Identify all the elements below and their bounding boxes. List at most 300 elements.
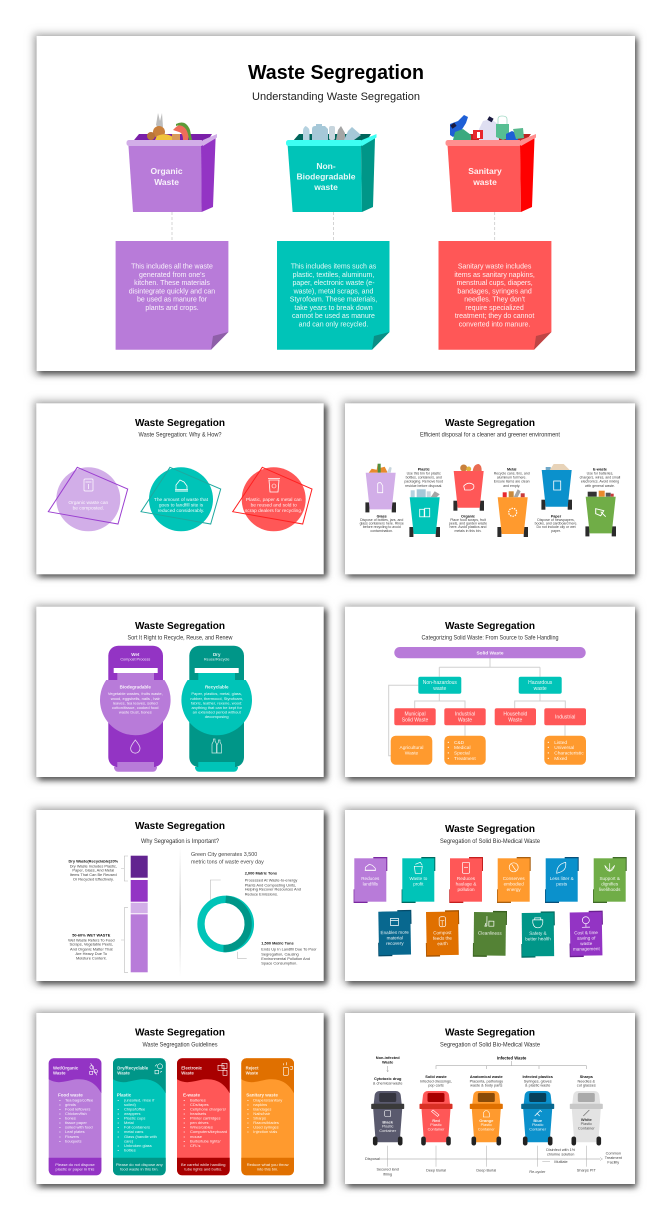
node: solid waste: Solid Waste bbox=[476, 650, 504, 656]
text: dry waste: Paper, Glass, And Metal bbox=[72, 868, 114, 873]
label: metal: aluminum foil here. bbox=[497, 475, 527, 479]
card: compost feeds the earth bbox=[425, 910, 460, 957]
bin: sanitary waste: waste bbox=[472, 177, 497, 187]
disposal flow: filling bbox=[383, 1172, 392, 1176]
card: cost and time saving: waste bbox=[580, 941, 593, 946]
card: reject waste: into this bin. bbox=[257, 1167, 278, 1172]
text: green city: metric tons of waste every day bbox=[191, 860, 264, 866]
bin: paper bbox=[541, 464, 572, 510]
card: dry recyclable waste: Unbroken glass bbox=[124, 1143, 152, 1148]
note card: sanitary waste: menstrual cups, diapers, bbox=[456, 280, 533, 287]
label: paper: paper. bbox=[551, 529, 561, 533]
label: infected waste tree: Infected Waste bbox=[497, 1056, 527, 1060]
card: dry recyclable waste: Glass (handle with bbox=[124, 1134, 157, 1139]
circle: landfill reduction bbox=[141, 467, 221, 531]
label: anatomical waste: waste & body parts bbox=[470, 1084, 503, 1088]
node: agricultural waste: Agricultural bbox=[400, 745, 424, 751]
label: metal: and empty. bbox=[503, 484, 520, 488]
label: sharps: Needles & bbox=[578, 1080, 596, 1084]
card: reject waste: • bbox=[247, 1102, 249, 1107]
card: electronic waste: • bbox=[184, 1129, 186, 1134]
callout: 2,000 metric tons: Reduce Emissions. bbox=[245, 891, 278, 896]
disposal flow: Deep Burial bbox=[476, 1169, 496, 1173]
disposal flow: Disposal bbox=[365, 1156, 380, 1161]
label: infected plastics: Infected plastics bbox=[522, 1074, 553, 1079]
note card: sanitary waste: converted into manure. bbox=[459, 321, 530, 328]
card: dry recyclable waste: wrappers bbox=[124, 1111, 140, 1116]
node: hazardous sublist: • bbox=[548, 752, 550, 756]
note card: sanitary waste: Sanitary waste includes bbox=[458, 264, 532, 270]
text: dry waste: Dry Waste Includes Plastic, bbox=[70, 863, 117, 868]
label: paper bbox=[535, 514, 577, 533]
card: reject waste: Reject bbox=[246, 1065, 259, 1070]
label: metal: Ensure items are clean bbox=[494, 480, 530, 484]
card: reject waste: Diapers/sanitary bbox=[253, 1097, 282, 1102]
node: hazardous sublist: • bbox=[548, 746, 550, 751]
card: less litter and pests bbox=[545, 857, 579, 903]
node: hazardous sublist: Characteristic bbox=[554, 750, 584, 756]
node: industrial sublist: • bbox=[448, 741, 450, 746]
node: industrial bbox=[544, 708, 586, 725]
node: hazardous sublist: Listed bbox=[554, 740, 567, 746]
label: anatomical waste bbox=[470, 1074, 504, 1088]
callout: 1,500 metric tons bbox=[237, 940, 317, 966]
text: wet waste: Moisture Content. bbox=[76, 956, 107, 961]
card: wet biodegradable: Biodegradable bbox=[120, 684, 151, 689]
note card: organic waste: plants and crops. bbox=[145, 305, 199, 312]
card: electronic waste: • bbox=[184, 1102, 186, 1107]
card: electronic waste: tube lights and bulbs. bbox=[184, 1167, 222, 1172]
label: anatomical waste: Anatomical waste bbox=[470, 1074, 504, 1079]
label: paper: Do not include oily or wet bbox=[536, 525, 576, 529]
note card: sanitary waste: needles. They don't bbox=[464, 297, 525, 304]
card: reject waste: Reduce what you throw bbox=[247, 1162, 289, 1167]
note card: sanitary waste: bandages, syringes and bbox=[457, 288, 532, 295]
node: non-hazardous waste bbox=[418, 677, 461, 694]
bin: non-biodegradable waste: waste bbox=[313, 182, 338, 192]
node: hazardous waste: waste bbox=[534, 686, 547, 692]
subtitle: Sort It Right to Recycle, Reuse, and Renew bbox=[128, 636, 233, 642]
card: support and dignifies livelihoods bbox=[593, 857, 627, 903]
card: wet organic waste: plastic or paper in this bbox=[56, 1167, 94, 1172]
card: dry recyclable: anything that can be kept for bbox=[191, 705, 243, 710]
disposal flow: Re-cycler bbox=[529, 1170, 546, 1174]
card: wet biodegradable bbox=[100, 646, 171, 772]
card: reduces landfills bbox=[354, 857, 387, 903]
card: wet organic waste: • bbox=[59, 1111, 61, 1116]
circle: recycling: scrap dealers for recycling. bbox=[245, 508, 302, 514]
bin: black cytotoxic bbox=[371, 1091, 404, 1146]
label: e-waste: with general waste. bbox=[585, 484, 615, 488]
disposal flow: Deep Burial bbox=[426, 1169, 446, 1173]
card: electronic waste: mouse bbox=[190, 1134, 203, 1139]
icon: bottles bbox=[212, 739, 222, 753]
node: hazardous sublist bbox=[544, 736, 586, 765]
card: dry recyclable bbox=[181, 646, 252, 772]
card: cleanliness bbox=[473, 911, 507, 957]
disposal flow: Treatment bbox=[605, 1156, 623, 1160]
card: wet organic waste: • bbox=[59, 1134, 61, 1139]
panel: sort it right bbox=[33, 604, 327, 780]
card: reject waste: Razors/blades bbox=[253, 1120, 279, 1125]
note card: non-biodegradable waste: cannot be used as manure bbox=[292, 313, 375, 320]
note card: non-biodegradable waste: take years to break down bbox=[294, 305, 373, 312]
card: electronic waste: • bbox=[184, 1106, 186, 1111]
card: dry recyclable: an extended period without bbox=[193, 710, 242, 714]
text: wet waste: Scraps, Vegetable Peels, bbox=[70, 942, 113, 947]
bin: red solid waste: Container bbox=[428, 1126, 445, 1131]
icon: water drop bbox=[131, 740, 140, 753]
title: Waste Segregation bbox=[445, 418, 535, 429]
card: reject waste: • bbox=[247, 1097, 249, 1102]
text: wet waste bbox=[68, 933, 115, 961]
card: electronic waste: CDs/tapes bbox=[190, 1102, 209, 1107]
bin: red solid waste: Red bbox=[432, 1118, 440, 1123]
card: dry recyclable: fabric, leather, rexene, wood: bbox=[191, 700, 242, 705]
card: conserves embodied energy bbox=[497, 857, 531, 903]
subtitle: Why Segregation is Important? bbox=[141, 839, 220, 845]
label: plastic: Plastic bbox=[418, 467, 430, 471]
node: municipal solid waste: Municipal bbox=[404, 712, 426, 718]
node: household waste bbox=[495, 708, 536, 725]
text: wet waste: Are Heavy Due To bbox=[76, 951, 107, 956]
card: dry recyclable waste: Waste bbox=[117, 1071, 130, 1076]
card: safety and better health: better health bbox=[525, 936, 551, 941]
card: enables more material recovery: Enables more bbox=[380, 930, 409, 935]
card: dry recyclable waste: Dry/Recyclable bbox=[117, 1065, 149, 1070]
node: municipal solid waste: Solid Waste bbox=[402, 718, 428, 724]
subtitle: Categorizing Solid Waste: From Source to Safe Handling bbox=[422, 636, 558, 642]
card: electronic waste: pen drives bbox=[190, 1120, 208, 1125]
callout: 2,000 metric tons: Plants And Composting Units, bbox=[245, 882, 296, 887]
card: reject waste: Sharps bbox=[253, 1116, 266, 1121]
node: hazardous sublist: • bbox=[548, 757, 550, 762]
card: wet biodegradable: Compost Process bbox=[120, 658, 150, 662]
card: wet organic waste: Food leftovers bbox=[65, 1106, 90, 1111]
bin: sanitary waste: Sanitary bbox=[468, 166, 502, 176]
label: infected plastics bbox=[522, 1074, 553, 1088]
card: safety and better health bbox=[521, 911, 555, 958]
disposal flow: Mutilate bbox=[554, 1160, 568, 1164]
card: reject waste: Bandages bbox=[253, 1106, 271, 1111]
label: metal: Recycle cans, tins, and bbox=[494, 471, 530, 475]
text: dry waste: Or Recycled Effectively. bbox=[73, 877, 114, 882]
bin: metal bbox=[497, 489, 528, 537]
text: wet waste: Wet Waste Refers To Food bbox=[68, 937, 115, 942]
title: Waste Segregation bbox=[135, 1028, 225, 1039]
node: industrial sublist: C&D bbox=[454, 740, 465, 746]
node: hazardous waste: Hazardous bbox=[528, 680, 553, 686]
text: dry waste bbox=[69, 859, 119, 882]
note card: non-biodegradable waste: plastic, textiles, aluminum, bbox=[293, 272, 374, 279]
card: dry recyclable: Dry bbox=[213, 652, 221, 657]
card: cost and time saving: saving of bbox=[577, 935, 596, 941]
card: wet organic waste: Flowers bbox=[65, 1134, 79, 1139]
card: enables more material recovery bbox=[378, 910, 412, 956]
bin: organic waste bbox=[126, 113, 217, 212]
label: organic: Organic bbox=[461, 514, 475, 518]
circle: composting: Organic waste can bbox=[68, 500, 108, 506]
card: wet organic waste bbox=[49, 1058, 101, 1175]
card: wet organic waste: Wet/Organic bbox=[53, 1065, 79, 1070]
text: wet waste: And Organic Matter That bbox=[70, 946, 113, 951]
node: industrial waste: Industrial bbox=[455, 712, 475, 718]
card: dry recyclable: Paper, plastics, metal, glass, bbox=[191, 691, 242, 696]
card: wet organic waste: Please do not dispose bbox=[55, 1162, 95, 1167]
card: electronic waste: • bbox=[184, 1138, 186, 1143]
card: wet organic waste: bouquets bbox=[65, 1138, 81, 1143]
node: agricultural waste: Waste bbox=[405, 750, 419, 756]
note card: sanitary waste bbox=[438, 241, 551, 350]
bin: orange anatomical bbox=[470, 1091, 503, 1146]
card: wet organic waste: • bbox=[59, 1102, 61, 1107]
bin: glass bbox=[365, 464, 396, 512]
panel: guidelines bbox=[33, 1010, 327, 1187]
title: Waste Segregation bbox=[135, 418, 225, 429]
card: wet organic waste: tissue paper bbox=[65, 1120, 87, 1125]
bin: red solid waste bbox=[420, 1091, 452, 1146]
card: wet organic waste: • bbox=[59, 1138, 61, 1143]
bin: non-biodegradable waste: Non- bbox=[316, 161, 336, 171]
label: non-infected waste: Non-infected bbox=[376, 1055, 400, 1060]
card: electronic waste: Bulbs/tube lights/ bbox=[190, 1138, 221, 1143]
bin: white sharps bbox=[570, 1091, 603, 1146]
label: glass: glass containers here. Rinse bbox=[360, 522, 404, 526]
card: wet organic waste: Food waste bbox=[58, 1093, 83, 1098]
bin: orange anatomical: Plastic bbox=[481, 1122, 492, 1127]
circle: recycling bbox=[233, 467, 312, 531]
label: infected plastics: Syringes, gloves bbox=[524, 1080, 552, 1084]
panel: bio-medical waste bins bbox=[342, 1010, 637, 1187]
node: non-hazardous waste: Non-hazardous bbox=[423, 680, 457, 686]
label: sharps: cut glasses bbox=[577, 1084, 596, 1088]
node: household waste: Household bbox=[503, 712, 527, 718]
card: reduces landfills: landfills bbox=[363, 881, 379, 886]
subtitle: Segregation of Solid Bio-Medical Waste bbox=[440, 1042, 541, 1048]
card: conserves embodied energy: energy bbox=[507, 887, 521, 892]
card: support and dignifies livelihoods: Support & bbox=[599, 876, 620, 881]
label: non-infected waste bbox=[376, 1055, 400, 1072]
card: wet organic waste: • bbox=[59, 1129, 61, 1134]
card: wet organic waste: • bbox=[59, 1116, 61, 1121]
label: infected waste tree bbox=[436, 1056, 586, 1069]
node: industrial sublist: Medical bbox=[454, 745, 471, 751]
circle: recycling: Plastic, paper & metal can bbox=[246, 497, 302, 503]
label: glass: before recycling to avoid bbox=[363, 525, 401, 529]
card: wet biodegradable: wood, eggshells, nails , hair bbox=[111, 696, 161, 701]
title: Waste Segregation bbox=[248, 62, 424, 84]
card: dry recyclable waste: • bbox=[118, 1143, 120, 1148]
label: glass bbox=[360, 514, 404, 533]
node: industrial waste: Waste bbox=[458, 718, 472, 724]
card: dry recyclable waste: care) bbox=[124, 1138, 134, 1143]
card: wet organic waste: Chicken/fish bbox=[65, 1111, 87, 1116]
label: e-waste: electronics. Avoid mixing bbox=[581, 480, 619, 484]
card: electronic waste: Be careful while handling bbox=[181, 1162, 226, 1167]
disposal flow: Secured land bbox=[377, 1168, 399, 1172]
card: enables more material recovery: recovery bbox=[386, 941, 404, 946]
card: reject waste: • bbox=[247, 1125, 249, 1130]
bin: organic bbox=[453, 464, 484, 511]
node: household waste: Waste bbox=[508, 718, 523, 724]
card: electronic waste: • bbox=[184, 1134, 186, 1139]
node: industrial waste bbox=[444, 708, 486, 725]
card: electronic waste bbox=[177, 1058, 230, 1175]
card: electronic waste: • bbox=[184, 1125, 186, 1130]
card: dry recyclable waste: Chips/toffee bbox=[124, 1106, 146, 1111]
title: Waste Segregation bbox=[135, 821, 225, 832]
card: dry recyclable waste: • bbox=[118, 1129, 120, 1134]
label: solid waste: Infected dressings, bbox=[420, 1080, 452, 1084]
callout: 2,000 metric tons: Helping Recover Resources And bbox=[245, 887, 301, 892]
card: dry recyclable waste: • bbox=[118, 1125, 120, 1130]
card: support and dignifies livelihoods: livelihoods bbox=[599, 887, 621, 892]
card: wet organic waste: • bbox=[59, 1125, 61, 1130]
disposal flow: Disinfect with 1% bbox=[546, 1148, 576, 1152]
card: dry recyclable waste: • bbox=[118, 1106, 120, 1111]
label: organic: peels, and garden waste bbox=[449, 522, 487, 526]
panel: efficient disposal bins bbox=[342, 400, 637, 577]
label: solid waste: pop carts bbox=[428, 1084, 444, 1088]
note card: organic waste: be used as manure for bbox=[137, 297, 208, 304]
card: electronic waste: Waste bbox=[181, 1071, 194, 1076]
callout: 1,500 metric tons: 1,500 Matric Tons bbox=[261, 940, 294, 945]
circle: landfill reduction: reduced considerably. bbox=[158, 508, 204, 514]
node: hazardous sublist: • bbox=[548, 741, 550, 746]
card: reject waste: • bbox=[247, 1106, 249, 1111]
note card: non-biodegradable waste bbox=[277, 241, 390, 350]
bin: blue infected plastics: Container bbox=[529, 1126, 547, 1131]
callout: 2,000 metric tons bbox=[210, 871, 301, 900]
bin: black cytotoxic: Container bbox=[379, 1128, 397, 1133]
callout: 1,500 metric tons: Environmental Pollution And bbox=[261, 956, 310, 961]
node: hazardous sublist: Universal bbox=[554, 745, 574, 751]
bin: non-biodegradable waste: Biodegradable bbox=[296, 172, 356, 182]
card: electronic waste: • bbox=[184, 1097, 186, 1102]
subtitle: Waste Segregation Guidelines bbox=[142, 1042, 218, 1048]
card: conserves embodied energy: Conserves bbox=[503, 876, 525, 881]
bin: orange anatomical: Container bbox=[478, 1126, 495, 1131]
note card: organic waste: kitchen. These materials bbox=[134, 280, 210, 287]
circle: recycling: be reused and sold to bbox=[251, 502, 297, 508]
card: wet organic waste: bones bbox=[65, 1116, 76, 1121]
bin: white sharps: White bbox=[581, 1117, 593, 1122]
card: cost and time saving: management bbox=[573, 946, 601, 952]
node: industrial sublist: Special bbox=[454, 750, 470, 756]
bin: non-biodegradable waste bbox=[286, 124, 376, 212]
callout: 2,000 metric tons: Processed At Waste-to-energy bbox=[245, 877, 297, 882]
card: dry recyclable waste: food waste in this bin. bbox=[120, 1167, 159, 1172]
text: green city bbox=[191, 852, 264, 866]
node: industrial sublist bbox=[444, 736, 486, 765]
circle: landfill reduction: The amount of waste that bbox=[154, 497, 209, 503]
card: dry recyclable waste: soiled) bbox=[124, 1102, 136, 1107]
card: dry recyclable waste: • bbox=[118, 1116, 120, 1121]
card: dry recyclable waste: Plastic cups bbox=[124, 1116, 145, 1121]
card: compost feeds the earth: earth bbox=[437, 941, 448, 946]
card: compost feeds the earth: Compost bbox=[433, 930, 452, 935]
node: industrial sublist: • bbox=[448, 752, 450, 756]
label: plastic: bottles, containers, and bbox=[406, 475, 442, 479]
card: dry recyclable waste: • bbox=[118, 1134, 120, 1139]
label: plastic bbox=[404, 467, 443, 488]
card: electronic waste: • bbox=[184, 1143, 186, 1148]
card: cost and time saving bbox=[569, 911, 603, 957]
title: Waste Segregation bbox=[445, 824, 535, 835]
card: dry recyclable: Reuse/Recycle bbox=[204, 658, 229, 662]
card: reject waste: Used syringes bbox=[253, 1125, 279, 1130]
card: dry recyclable waste: Metal bbox=[124, 1120, 134, 1125]
note card: sanitary waste: treatment; they do cannot bbox=[455, 313, 534, 320]
card: electronic waste: Computers/keyboard bbox=[190, 1129, 227, 1134]
card: reject waste: • bbox=[247, 1116, 249, 1121]
circle: composting bbox=[48, 467, 128, 531]
card: electronic waste: Electronic bbox=[181, 1065, 203, 1070]
circle: composting: be composted. bbox=[73, 506, 104, 512]
card: reject waste: Nails/hair bbox=[253, 1111, 271, 1116]
card: dry recyclable: rubber, thermocol, Styrofoam, bbox=[190, 696, 243, 701]
card: wet organic waste: Tea bags/coffee bbox=[65, 1097, 94, 1102]
note card: organic waste: disintegrate quickly and can bbox=[129, 288, 215, 295]
card: enables more material recovery: material bbox=[387, 935, 403, 941]
card: reduces haulage and pollution bbox=[449, 857, 483, 903]
card: reject waste: • bbox=[247, 1111, 249, 1116]
node: non-hazardous waste: waste bbox=[433, 686, 447, 692]
bin: e-waste bbox=[585, 491, 616, 536]
node: solid waste bbox=[394, 647, 586, 658]
donut chart bbox=[201, 899, 250, 949]
panel: benefits grid bbox=[342, 807, 637, 984]
card: electronic waste: Wires/cables bbox=[190, 1125, 213, 1130]
label: cytotoxic drug: & chemical waste bbox=[373, 1082, 402, 1086]
label: paper: Dispose of newspapers, bbox=[537, 518, 575, 522]
node: industrial sublist: • bbox=[448, 757, 450, 762]
card: dry recyclable waste: Foil containers bbox=[124, 1125, 150, 1130]
note card: non-biodegradable waste: and can only recycled. bbox=[299, 321, 368, 328]
note card: organic waste bbox=[116, 241, 228, 350]
card: reject waste: • bbox=[247, 1129, 249, 1134]
text: wet waste: 50-60% WET WASTE bbox=[72, 933, 111, 938]
label: organic: here. Avoid plastics and bbox=[450, 525, 487, 529]
node: hazardous waste bbox=[519, 677, 562, 694]
bin: sanitary waste bbox=[446, 115, 536, 212]
card: reduces haulage and pollution: pollution bbox=[457, 887, 475, 892]
card: cost and time saving: Cost & time bbox=[574, 930, 598, 935]
card: less litter and pests: Less litter & bbox=[550, 876, 574, 881]
bin: plastic bbox=[409, 489, 440, 537]
callout: 1,500 metric tons: Space Consumption. bbox=[261, 961, 297, 966]
text: green city: Green City generates 3,500 bbox=[191, 852, 257, 858]
disposal flow: Common bbox=[606, 1152, 621, 1156]
card: reject waste: Injection vials bbox=[253, 1129, 277, 1134]
label: non-infected waste: Waste bbox=[382, 1060, 394, 1065]
card: dry recyclable waste: Plastic bbox=[117, 1093, 132, 1098]
card: wet organic waste: • bbox=[59, 1097, 61, 1102]
disposal flow bbox=[365, 1146, 623, 1176]
bin: orange anatomical: Orange bbox=[479, 1118, 494, 1123]
card: cleanliness: Cleanliness bbox=[478, 931, 502, 936]
card: electronic waste: • bbox=[184, 1120, 186, 1125]
card: wet biodegradable: cotton/tissue, cooked food bbox=[112, 705, 159, 710]
note card: organic waste: generated from one's bbox=[139, 272, 205, 279]
label: glass: Glass bbox=[377, 514, 387, 518]
card: electronic waste: Cellphone chargers/ bbox=[190, 1106, 227, 1111]
callout: 2,000 metric tons: 2,000 Matric Tons bbox=[245, 871, 277, 876]
bin: black cytotoxic: Plastic bbox=[382, 1124, 393, 1129]
label: glass: Dispose of bottles, jars, and bbox=[360, 518, 403, 522]
card: wet biodegradable: waste Dust, bones bbox=[119, 710, 152, 714]
label: infected plastics: & plastic waste bbox=[525, 1084, 550, 1088]
